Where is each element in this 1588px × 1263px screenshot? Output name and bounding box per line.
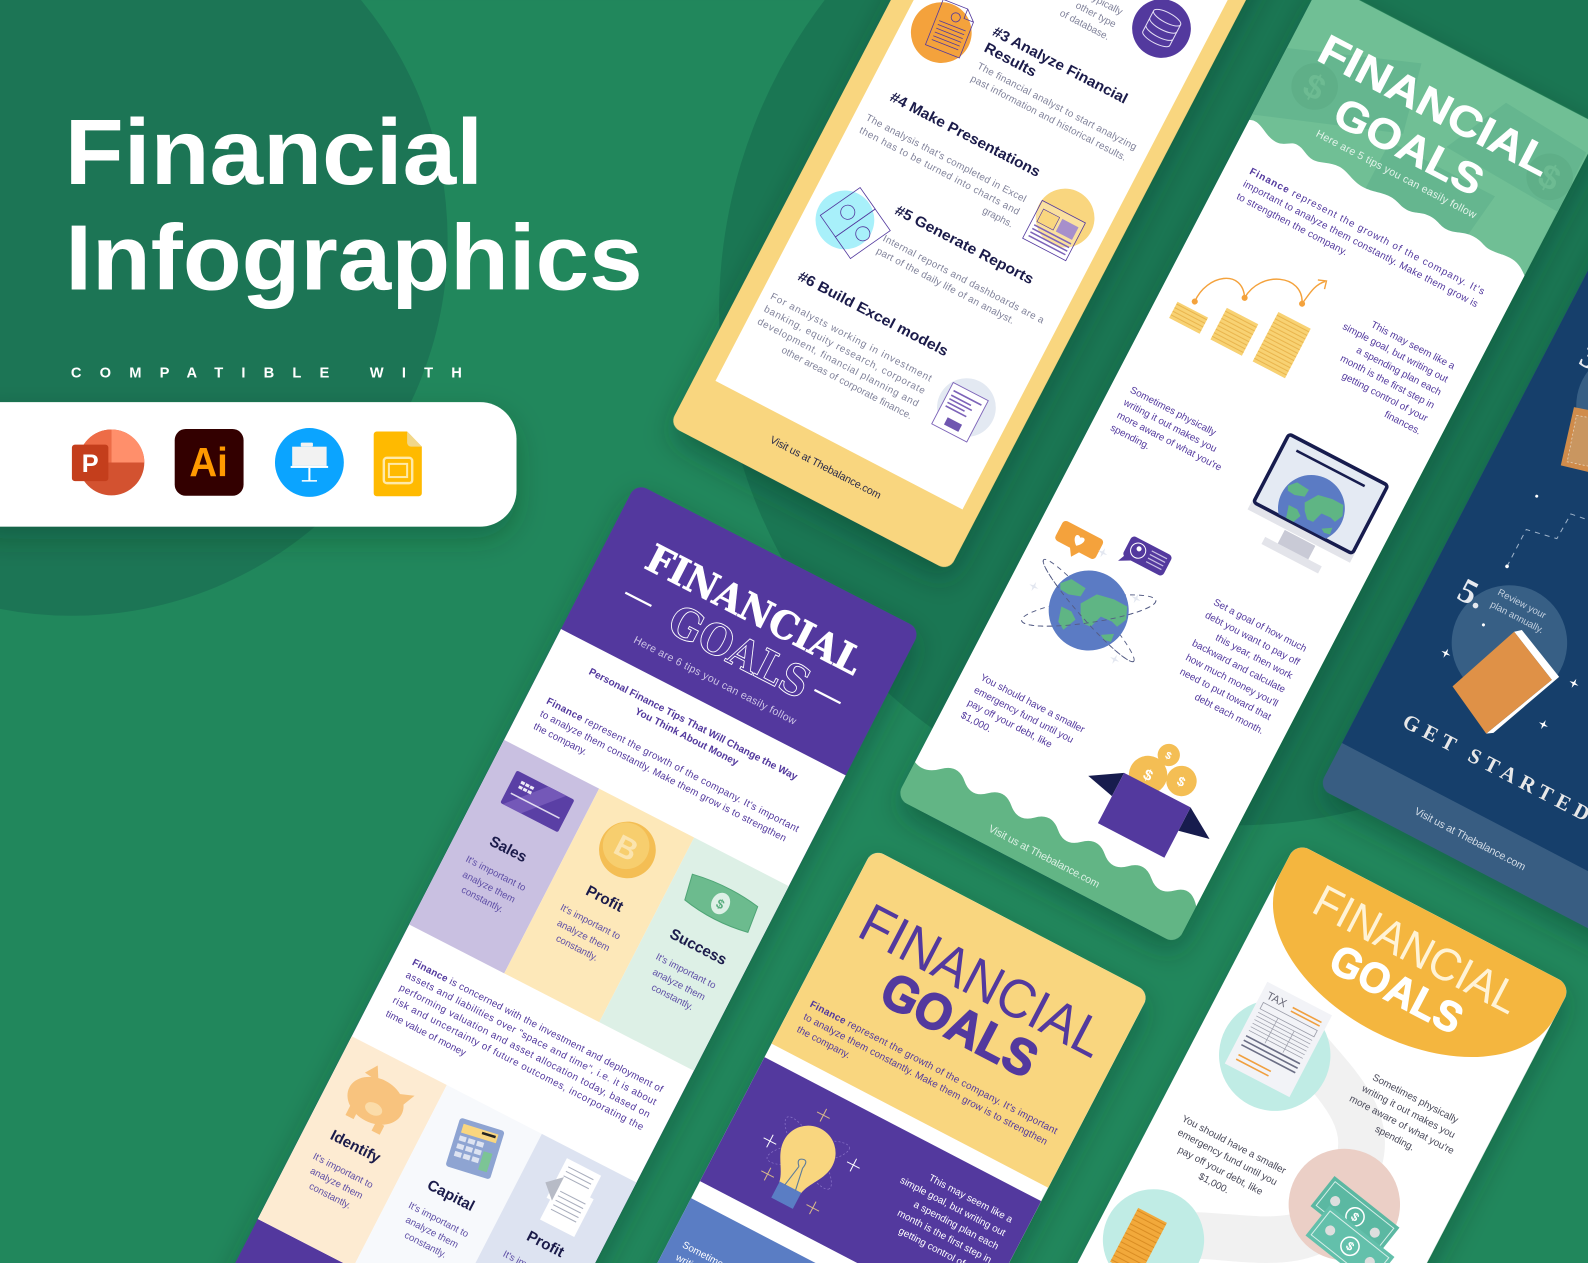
text: emergency fund: emergency fund until you <box>972 685 1075 746</box>
icon: box with coins: $ <box>1175 773 1189 790</box>
text: set a goal: this year, then work <box>1213 633 1294 682</box>
body 3: past information and historical results. <box>969 74 1128 164</box>
subtitle: Here are 5 tips you can easily follow <box>1314 128 1479 221</box>
panel: purple bulb tip: a spending plan each <box>912 1199 1000 1252</box>
panel: sales: constantly. <box>459 885 505 915</box>
panel: capital <box>353 1085 542 1263</box>
icon: google slides <box>374 431 422 496</box>
step 5 folder icon <box>1440 614 1570 751</box>
panel: capital: analyze them <box>404 1215 460 1251</box>
icon: banknotes: $ <box>1343 1239 1357 1254</box>
step 5 number: 5. <box>1452 571 1492 617</box>
text: emergency fund: $1,000. <box>959 710 993 735</box>
icon: banknote: $ <box>714 896 728 913</box>
main title: Infographics <box>65 206 643 310</box>
text: this may seem: This may seem like a <box>1369 320 1457 372</box>
panel: profit <box>504 789 694 1022</box>
heading 6: #6 Build Excel models <box>795 269 951 360</box>
panel: profit: It's important to <box>558 902 622 942</box>
body 6: For analysts working in investment <box>768 291 934 384</box>
text: emergency fund: $1,000. <box>1196 1171 1231 1196</box>
text: set a goal: need to put toward that <box>1178 666 1273 723</box>
text: this may seem: finances. <box>1382 409 1423 437</box>
card: yellow header financial goals <box>499 849 1150 1263</box>
text: set a goal <box>1167 597 1309 737</box>
icon: box with coins <box>1071 717 1240 872</box>
body 4: then has to be turned into charts and <box>857 125 1021 218</box>
header money decoration <box>1242 1 1588 279</box>
text: this may seem: simple goal, but writing out <box>1341 321 1450 385</box>
goals outline: GOALS <box>660 596 818 709</box>
icon: box with coins: $ <box>1140 766 1156 785</box>
icon: newspaper <box>1022 178 1105 265</box>
compatible with label: COMPATIBLE WITH <box>71 365 462 381</box>
panel: success: analyze them <box>650 967 707 1003</box>
card: purple financial goals <box>127 483 921 1263</box>
step 5 circle <box>1432 565 1587 721</box>
text: sometimes: spending. <box>1373 1124 1416 1154</box>
panel: identify <box>258 1036 447 1263</box>
intro paragraph: Finance represent the growth of the company. It's <box>1248 166 1486 298</box>
text: this may seem: getting control of your <box>1340 371 1430 425</box>
panel: success: Success <box>667 926 729 969</box>
text: sometimes: writing it out makes you <box>1121 397 1218 455</box>
panel: identify: It's important to <box>311 1151 375 1191</box>
panel: sales: Sales <box>487 833 530 866</box>
intro paragraph: important to analyze them constantly. Make them grow is <box>1241 179 1480 310</box>
panel: profit: Profit <box>583 882 626 916</box>
text: sometimes: spending. <box>1108 423 1152 452</box>
step 5 text: plan annually. <box>1488 599 1545 636</box>
footer text: Visit us at Thebalance.com <box>986 823 1102 891</box>
grey ribbon <box>1153 1022 1403 1263</box>
intro paragraph: the company. <box>531 721 589 758</box>
icon: documents <box>529 1154 605 1237</box>
card: white with orange header <box>922 843 1571 1263</box>
text: sometimes: Sometimes physically <box>1370 1072 1460 1126</box>
icon: coin stacks with arcs <box>1169 224 1334 378</box>
text: set a goal: Set a goal of how much <box>1211 597 1308 655</box>
icon: report document <box>900 0 984 74</box>
text: emergency fund: pay off your debt, like <box>1176 1145 1265 1198</box>
text: this may seem <box>1313 308 1457 438</box>
text: set a goal: debt each month. <box>1192 692 1265 737</box>
body 6: other areas of corporate finance. <box>779 345 914 422</box>
body 5: part of the daily life of an analyst. <box>874 246 1016 327</box>
panel: capital: constantly. <box>402 1230 448 1261</box>
panel: success: It's important to <box>654 952 718 992</box>
subheading: You Think About Money <box>633 706 740 769</box>
icon: bitcoin coin <box>589 812 666 888</box>
panel: identify: Identify <box>327 1127 384 1167</box>
card: yellow steps infographic <box>669 0 1370 571</box>
partial text top <box>1058 0 1125 43</box>
second paragraph: time value of money <box>384 1009 468 1059</box>
panel: profit two <box>448 1134 636 1263</box>
panel: identify: analyze them <box>308 1166 365 1202</box>
panel: profit two: Profit <box>524 1228 567 1261</box>
icon: globe with orbits and chat bubbles <box>1007 503 1188 685</box>
title: GOALS <box>1326 88 1492 206</box>
text: sometimes: writing it out makes you <box>1359 1083 1457 1141</box>
second paragraph: Finance is concerned with the investment and deployment of <box>410 957 665 1095</box>
icon: illustrator: Ai <box>189 439 228 485</box>
icon: credit card <box>500 770 575 832</box>
dashed path <box>1507 495 1588 597</box>
icon: box with coins: $ <box>1163 750 1173 763</box>
card: green financial goals <box>896 0 1588 944</box>
dark circle top left <box>0 0 448 616</box>
icon: banknotes <box>804 175 901 269</box>
heading 3: Results <box>981 40 1039 81</box>
title: FINANCIAL <box>638 536 870 685</box>
text: set a goal: backward and calculate <box>1190 638 1287 696</box>
text: sometimes <box>1340 1067 1470 1171</box>
intro paragraph: Finance represent the growth of the company. It's important <box>544 696 801 835</box>
body 6 <box>749 291 934 422</box>
paragraph: Finance represent the growth of the company. It's important <box>808 999 1059 1137</box>
second paragraph: assets and liabilities over "space and time", i.e. it is about <box>404 970 658 1108</box>
white body with waves <box>914 119 1530 910</box>
step 3 folder <box>1547 395 1588 486</box>
text: emergency fund <box>1160 1114 1288 1216</box>
text: sometimes: Sometimes physically <box>1128 385 1218 439</box>
panel: capital: It's important to <box>406 1200 470 1240</box>
second paragraph <box>384 957 665 1147</box>
step 5 text <box>1488 587 1552 636</box>
main title <box>65 100 643 310</box>
footer text: Visit us at Thebalance.com <box>1412 806 1528 873</box>
main title: Financial <box>65 100 483 204</box>
text: this may seem: month is the first step in <box>1338 353 1436 411</box>
text: sometimes <box>1107 384 1237 486</box>
title <box>1288 26 1559 229</box>
intro paragraph: to analyze them constantly. Make them grow is to strengthen <box>538 709 788 844</box>
heading 3: #3 Analyze Financial <box>990 24 1130 108</box>
panel: purple bulb tip: simple goal, but writing out <box>898 1175 1007 1239</box>
intro paragraph: to strengthen the company. <box>1234 191 1349 258</box>
partial text top: other type <box>1073 0 1118 31</box>
heading 4: #4 Make Presentations <box>887 89 1043 181</box>
text: this may seem: a spending plan each <box>1354 345 1443 398</box>
panel: profit: constantly. <box>554 933 600 964</box>
partial text top: of database. <box>1058 8 1111 43</box>
panel: capital: Capital <box>424 1177 477 1215</box>
card: navy get started <box>1319 0 1588 947</box>
paragraph: the company. <box>795 1024 852 1061</box>
dark circle behind cards <box>719 0 1588 825</box>
icon: banknote <box>679 871 762 935</box>
icon: piggy bank <box>336 1059 419 1141</box>
icon: banknotes <box>1267 1129 1431 1263</box>
title dashes <box>625 593 841 703</box>
panel: success <box>599 838 789 1071</box>
footer text: Visit us at Thebalance.com <box>768 434 883 502</box>
text: sometimes: more aware of what you're <box>1115 410 1224 474</box>
panel: blue tip <box>499 1198 968 1263</box>
panel: sales: It's important to <box>464 854 527 894</box>
icon: keynote <box>275 428 344 497</box>
panel: success: constantly. <box>649 982 695 1013</box>
second paragraph: performing valuation and asset allocation today, based on <box>397 982 652 1121</box>
panel: purple bulb tip <box>700 1057 1041 1263</box>
body 3: The financial analyst to start analyzing <box>975 61 1138 153</box>
icon: calculator <box>445 1117 505 1180</box>
icon: monitor <box>1248 433 1389 574</box>
compatibility pill <box>0 402 517 527</box>
icon: tax form: TAX <box>1264 990 1289 1011</box>
header money decoration: $ <box>1532 157 1566 199</box>
body 6: development, financial planning and <box>755 316 920 409</box>
text: sometimes: more aware of what you're <box>1347 1093 1456 1157</box>
title bold: GOALS <box>1322 935 1471 1044</box>
title thin: FINANCIAL <box>1305 875 1528 1024</box>
icon: coin stack <box>1085 1172 1222 1263</box>
body 4: graphs. <box>980 205 1015 230</box>
panel: profit: analyze them <box>555 918 611 954</box>
text: emergency fund: You should have a smaller <box>978 672 1087 736</box>
icon: invoice <box>926 368 1006 448</box>
title: FINANCIAL <box>1311 26 1559 186</box>
body 4: The analysis that's completed in Excel <box>864 113 1028 205</box>
panel: sales <box>409 740 599 973</box>
icon: powerpoint: P <box>82 450 99 478</box>
yellow header <box>772 849 1150 1188</box>
icon: tax form <box>1200 975 1353 1130</box>
subtitle: Here are 6 tips you can easily follow <box>632 634 799 728</box>
icon: database <box>1122 0 1201 68</box>
second paragraph: risk and uncertainty of future outcomes, incorporating the <box>391 995 646 1133</box>
text: emergency fund <box>959 672 1087 774</box>
panel: purple bulb tip: This may seem like a <box>927 1173 1015 1226</box>
body 5: Internal reports and dashboards are a <box>881 233 1046 327</box>
step 5 text: Review your <box>1496 587 1548 622</box>
header money decoration: $ <box>1297 66 1331 109</box>
sparkles <box>1431 489 1588 735</box>
text: set a goal: how much money you'll <box>1184 652 1280 710</box>
icon: light bulb <box>741 1089 877 1228</box>
step 3 circle <box>1557 330 1588 480</box>
orange header <box>1236 843 1571 1103</box>
heading 5: #5 Generate Reports <box>892 203 1036 288</box>
paragraph: to analyze them constantly. Make them grow is to strengthen <box>801 1012 1049 1148</box>
text: emergency fund: emergency fund until you <box>1175 1127 1279 1188</box>
subheading: Personal Finance Tips That Will Change the Way <box>587 667 799 783</box>
icon: illustrator <box>175 429 244 496</box>
title heavy: GOALS <box>872 961 1047 1089</box>
title light: FINANCIAL <box>850 891 1116 1070</box>
icon: bitcoin coin: B <box>608 828 644 868</box>
body 6: banking, equity research, corporate <box>762 304 927 397</box>
text: emergency fund: pay off your debt, like <box>965 697 1054 751</box>
text: set a goal: debt you want to pay off <box>1203 610 1301 668</box>
icon: powerpoint <box>72 429 144 495</box>
text: emergency fund: You should have a smaller <box>1180 1114 1288 1177</box>
panel: identify: constantly. <box>307 1181 353 1212</box>
panel: sales: analyze them <box>460 869 517 905</box>
icon: banknotes: $ <box>1348 1209 1362 1225</box>
